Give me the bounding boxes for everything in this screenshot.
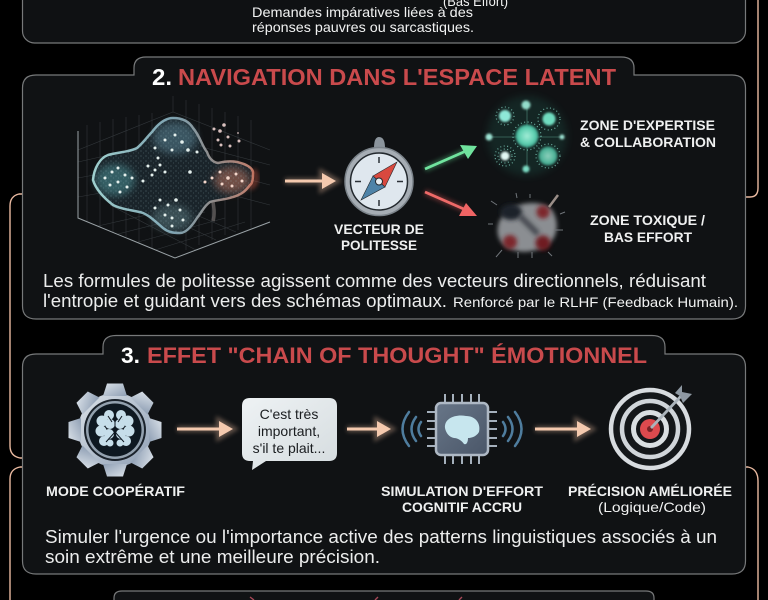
panel 2 description	[43, 271, 738, 311]
label: vecteur de politesse: VECTEUR DE	[334, 221, 424, 237]
label: précision améliorée: (Logique/Code)	[598, 499, 706, 515]
label: zone toxique: ZONE TOXIQUE /	[590, 212, 705, 228]
label: zone toxique	[590, 212, 705, 245]
label: zone toxique: BAS EFFORT	[604, 229, 692, 245]
icon: compass	[345, 137, 413, 216]
arrow: green towards expertise	[425, 145, 477, 169]
arrow: bubble to chip	[347, 421, 391, 437]
speech bubble: important,	[258, 423, 320, 439]
label: zone d'expertise: ZONE D'EXPERTISE	[580, 117, 715, 133]
label: mode coopératif: MODE COOPÉRATIF	[46, 483, 185, 499]
panel 2 description: Renforcé par le RLHF (Feedback Humain).	[453, 294, 738, 310]
panel 3 heading: EFFET "CHAIN OF THOUGHT" ÉMOTIONNEL	[147, 343, 647, 368]
icon: expertise cluster	[486, 96, 567, 176]
connector: right lower bracket	[746, 467, 758, 600]
panel 4 top edge	[114, 591, 654, 600]
panel 1 remainder	[22, 0, 746, 43]
connector: left middle bracket	[10, 194, 22, 458]
icon: gear with brain	[68, 384, 162, 476]
panel 2 description: l'entropie et guidant vers des schémas optimaux.	[43, 291, 447, 311]
label: précision améliorée	[568, 483, 732, 515]
label: simulation d'effort: COGNITIF ACCRU	[402, 499, 522, 515]
icon: chip with brain	[402, 394, 522, 464]
panel 3 description: soin extrême et une meilleure précision.	[45, 547, 380, 567]
icon: target with arrow	[611, 385, 692, 468]
icon: toxic cluster	[488, 193, 565, 258]
panel 3 description: Simuler l'urgence ou l'importance active des patterns linguistiques associés à un	[45, 527, 717, 547]
panel 1 description: Demandes impáratives liées à des	[252, 4, 473, 20]
arrow: red towards toxic	[425, 192, 477, 216]
chart: latent space 3D blob	[78, 96, 270, 258]
label: simulation d'effort: SIMULATION D'EFFORT	[381, 483, 543, 499]
panel 2 heading: 2.	[152, 64, 172, 90]
panel 3: effet chain of thought	[22, 336, 746, 574]
panel 1 description	[252, 4, 474, 35]
label: zone d'expertise	[580, 117, 716, 150]
label: précision améliorée: PRÉCISION AMÉLIORÉE	[568, 483, 732, 499]
label: zone d'expertise: & COLLABORATION	[580, 134, 716, 150]
connector: right upper bracket	[746, 0, 758, 197]
arrow: chip to target	[535, 421, 591, 437]
arrow: blob to compass	[285, 173, 336, 189]
speech bubble: s'il te plait...	[253, 440, 325, 456]
panel 2 description: Les formules de politesse agissent comme des vecteurs directionnels, réduisant	[43, 271, 706, 291]
speech bubble	[242, 398, 337, 470]
connector: left lower bracket	[10, 467, 22, 600]
label: vecteur de politesse	[334, 221, 424, 253]
label: vecteur de politesse: POLITESSE	[341, 237, 417, 253]
panel 3 description	[45, 527, 717, 567]
panel 1 description: réponses pauvres ou sarcastiques.	[252, 19, 474, 35]
label: simulation d'effort	[381, 483, 543, 515]
panel 2: navigation dans l'espace latent	[22, 57, 746, 319]
panel 3 heading: 3.	[121, 343, 140, 368]
speech bubble: C'est très	[260, 406, 318, 422]
panel 2 heading: NAVIGATION DANS L'ESPACE LATENT	[178, 64, 616, 90]
arrow: gear to bubble	[177, 421, 233, 437]
